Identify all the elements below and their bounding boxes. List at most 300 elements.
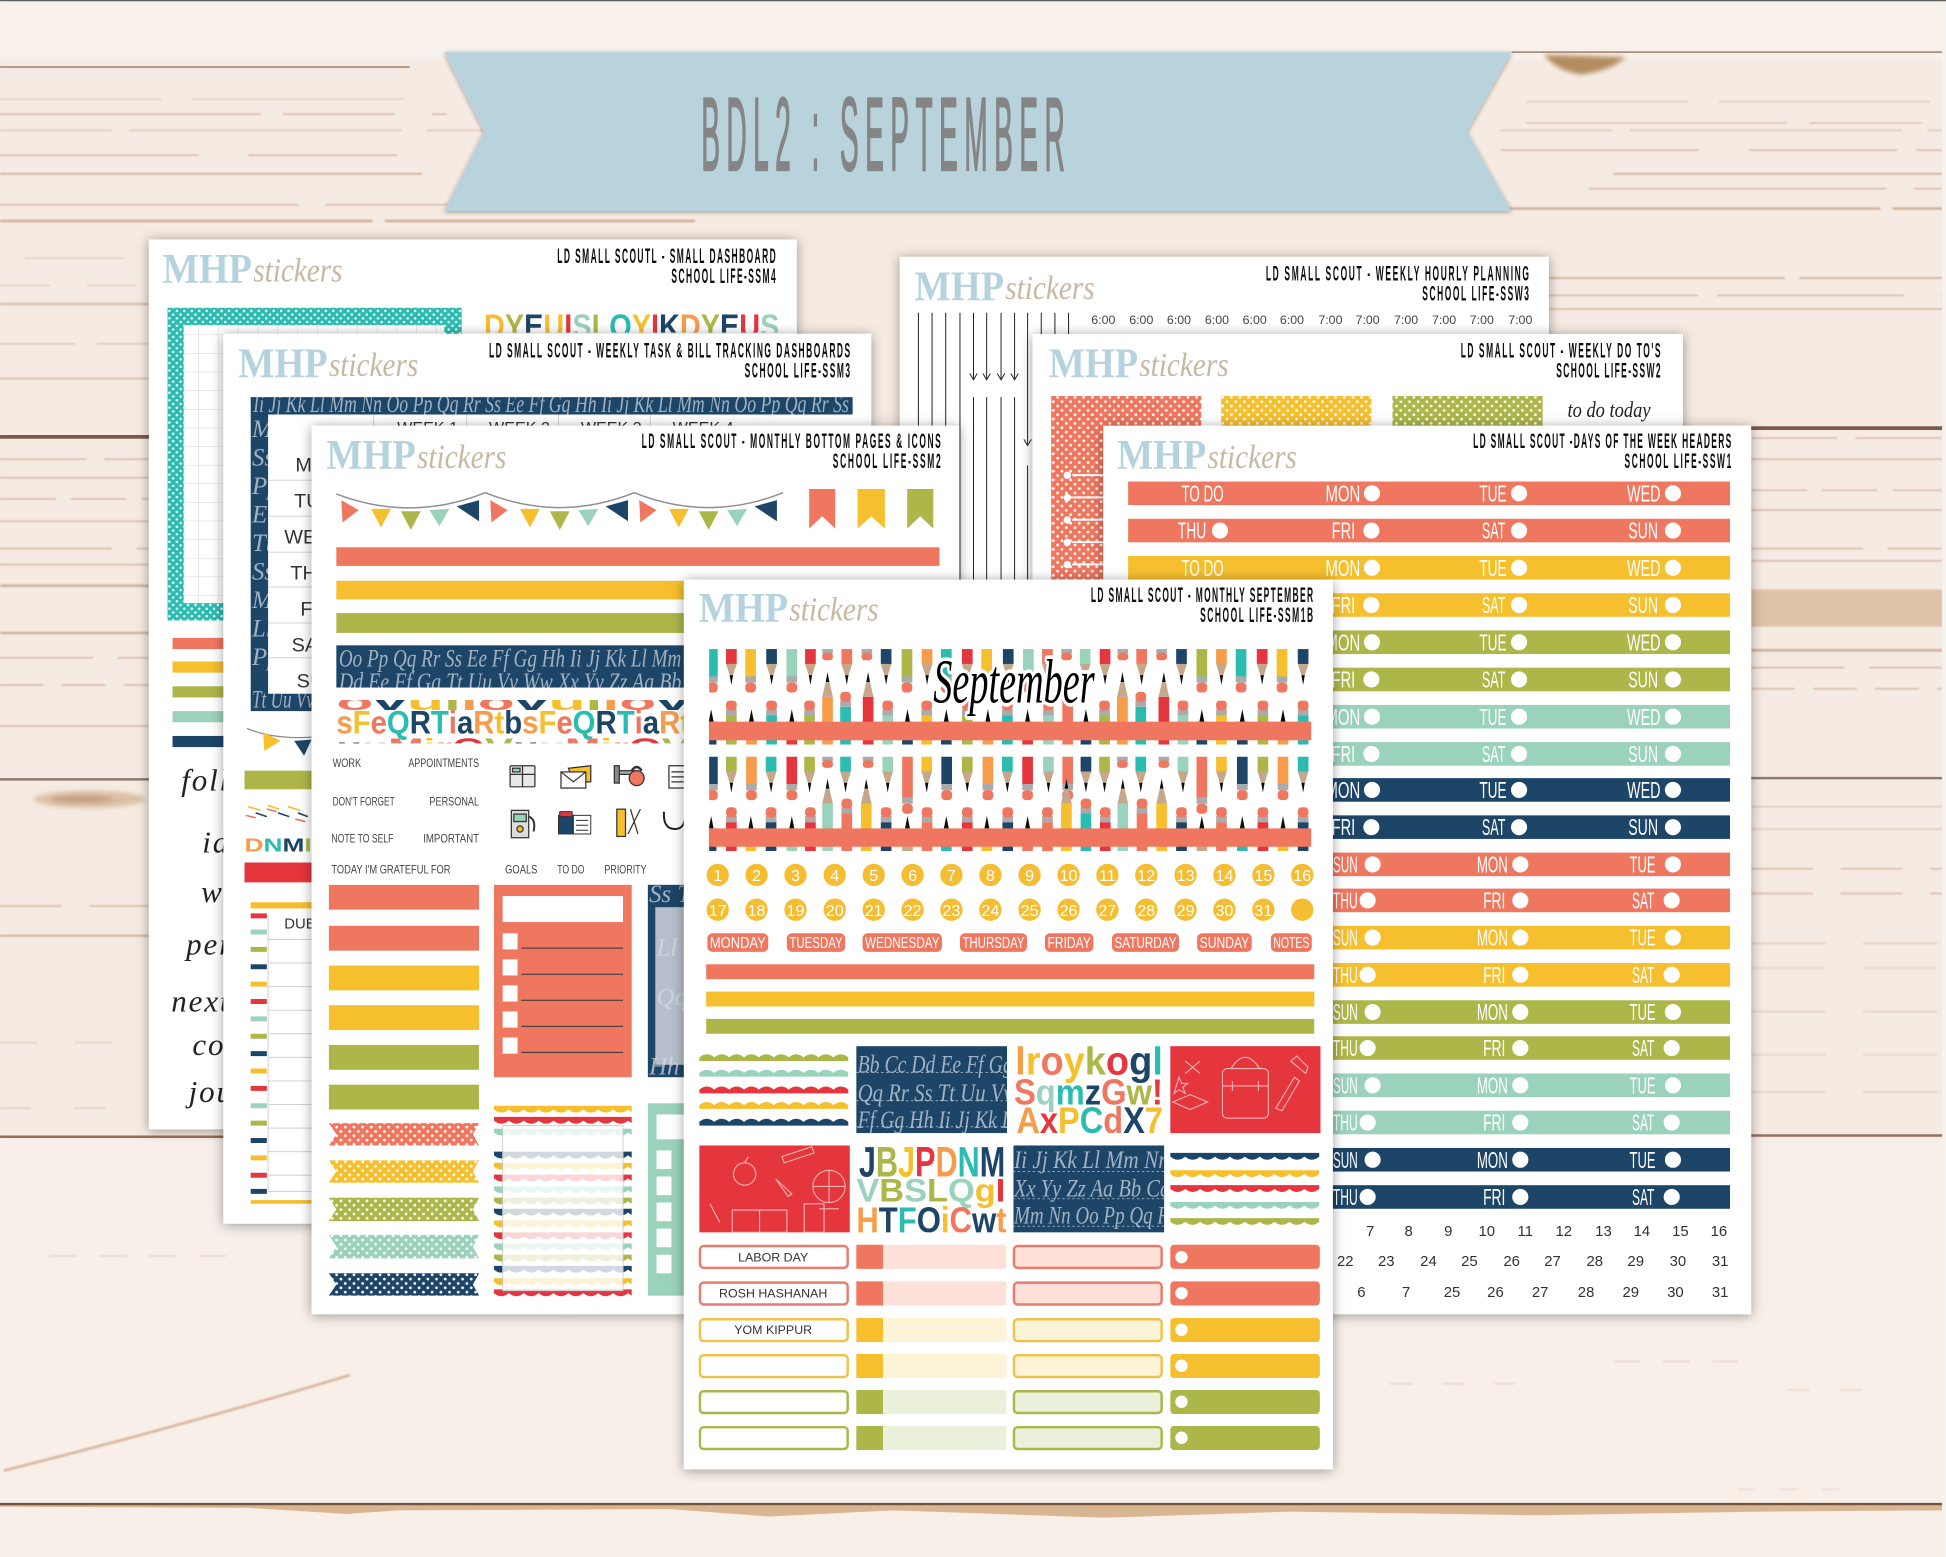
header strips: first cycle: SAT <box>1482 741 1505 767</box>
knot: left <box>34 791 145 808</box>
bunting <box>336 493 783 530</box>
script words: con <box>192 1027 243 1062</box>
sheet title: SCHOOL LIFE-SSM2 <box>833 449 941 473</box>
date circles: 5 <box>869 867 878 885</box>
date circles: 20 <box>826 902 844 920</box>
script words <box>171 763 254 1109</box>
date numbers: 23 <box>1378 1254 1395 1270</box>
green polka block <box>1392 396 1543 433</box>
mint checklist card <box>648 1103 697 1296</box>
header strips: first cycle: FRI <box>1332 592 1355 618</box>
script words: pers <box>184 926 247 961</box>
date numbers: 15 <box>1672 1224 1689 1240</box>
due table: DUE <box>284 916 316 932</box>
date circles: 31 <box>1254 902 1272 920</box>
yellow polka block <box>1221 396 1371 433</box>
header strips: first cycle: TUE <box>1479 555 1507 581</box>
header strips: second cycle: THU <box>1333 962 1358 988</box>
sheet title: SCHOOL LIFE-SSM4 <box>671 265 776 288</box>
colour bars <box>706 964 1314 1034</box>
weekday and week labels: FRI <box>300 599 332 621</box>
weekday and week labels: WEEK 3 <box>581 419 642 437</box>
date numbers <box>1337 1224 1728 1301</box>
header strips: first cycle: SUN <box>1628 667 1658 693</box>
logo: stickers <box>417 439 506 476</box>
header strips: second cycle: THU <box>1333 1035 1358 1061</box>
navy script tracker frame <box>251 391 864 713</box>
date circles: 4 <box>830 867 839 885</box>
date numbers: 6 <box>1357 1285 1366 1301</box>
time labels: 7:00 <box>1356 313 1380 327</box>
logo: stickers <box>329 347 418 384</box>
header strips: first cycle: MON <box>1325 777 1360 803</box>
date circles: 30 <box>1215 902 1233 920</box>
script block: row 2: Mm Nn Oo Pp Qq R <box>1013 1203 1169 1230</box>
due table <box>268 916 318 1191</box>
header strips: first cycle: SUN <box>1628 814 1658 840</box>
script words: follo <box>181 763 247 798</box>
date circles: 25 <box>1021 902 1039 920</box>
sheet: days of the week headers SSW1 <box>1103 426 1751 1314</box>
navy script tracker frame: Tt <box>252 530 274 557</box>
holiday names: LABOR DAY <box>738 1251 808 1265</box>
weekday labels: WEDNESDAY <box>865 934 940 952</box>
date numbers: 27 <box>1544 1254 1561 1270</box>
logo: MHP <box>326 432 416 479</box>
header strips: second cycle: TUE <box>1630 999 1656 1025</box>
banner: BDL2 September: BDL2 : SEPTEMBER <box>701 77 1065 193</box>
header strips: second cycle: FRI <box>1483 887 1505 913</box>
holiday names <box>719 1251 827 1337</box>
header strips: second cycle: THU <box>1333 1110 1358 1136</box>
script block: row 2: Ii Jj Kk Ll Mm Nn <box>1013 1147 1169 1174</box>
logo: stickers <box>253 253 343 290</box>
sheet title: LD SMALL SCOUT - WEEKLY TASK & BILL TRACKING DASHBOARDS <box>489 339 850 363</box>
date numbers: 30 <box>1670 1254 1686 1270</box>
date circles: 17 <box>709 902 727 920</box>
icon: bill <box>669 766 686 788</box>
logo: stickers <box>1208 439 1297 476</box>
date numbers: 12 <box>1555 1224 1572 1240</box>
colour stripes <box>173 638 247 747</box>
header strips: second cycle: FRI <box>1483 1184 1505 1210</box>
logo <box>915 263 1095 310</box>
header strips: first cycle: SAT <box>1482 518 1505 544</box>
knot: upper right <box>1544 55 1626 74</box>
weekday and week labels: THU <box>290 563 331 585</box>
logo: MHP <box>1117 432 1206 479</box>
alphabet block: row 1 <box>1015 1046 1162 1134</box>
script words: next r <box>171 983 254 1018</box>
icon: package <box>510 766 535 787</box>
two-tone label column <box>856 1245 1007 1450</box>
alphabet strip: u u M ir O V u u M ir O V <box>336 735 691 762</box>
logo <box>1117 432 1297 479</box>
weekday and week labels: MON <box>295 455 342 477</box>
sheet title <box>1266 262 1529 306</box>
date circles: 22 <box>904 902 922 920</box>
header strips: second cycle: THU <box>1333 1184 1358 1210</box>
time labels: 6:00 <box>1280 313 1304 327</box>
alphabet block: row 2: JBJPDNM <box>859 1138 1005 1185</box>
small stamp labels: PERSONAL <box>429 794 479 808</box>
event label column <box>700 1246 848 1449</box>
date numbers: 25 <box>1444 1285 1460 1301</box>
pale outlined label column <box>1014 1246 1162 1449</box>
date circles: 15 <box>1254 867 1272 885</box>
small stamp labels: PRIORITY <box>604 863 647 877</box>
sheet: weekly hourly planning SSW3 <box>900 257 1549 1147</box>
alphabet strip: sFeQRTiaRtbsFeQRTiaRt <box>336 704 690 740</box>
date numbers: 31 <box>1712 1285 1728 1301</box>
date circles: 29 <box>1177 902 1195 920</box>
date numbers: 7 <box>1402 1285 1410 1301</box>
date circles: 28 <box>1137 902 1155 920</box>
small stamp labels <box>331 756 647 877</box>
weekday labels: MONDAY <box>710 934 766 952</box>
date circles: 10 <box>1060 867 1078 885</box>
small stamp labels: GOALS <box>505 863 537 877</box>
tan wood band <box>1751 589 1942 627</box>
icon: comb and scissors <box>617 809 640 836</box>
sheet: small dashboard SSM4 <box>149 240 797 1129</box>
icon: medicine <box>558 812 591 834</box>
logo <box>326 432 506 479</box>
date numbers: 7 <box>1366 1224 1374 1240</box>
header strips: first cycle: FRI <box>1332 741 1355 767</box>
header strips: first cycle: MON <box>1325 629 1360 655</box>
weekday labels: SATURDAY <box>1114 934 1177 952</box>
header strips: first cycle: WED <box>1627 704 1661 730</box>
alphabet block: row 1: SqmzGw! <box>1014 1072 1163 1113</box>
sheet: weekly task and bill tracking SSM3 <box>223 334 871 1224</box>
time labels: 7:00 <box>1394 313 1418 327</box>
date numbers: 26 <box>1487 1285 1504 1301</box>
navy script card <box>648 884 684 1078</box>
header strips: first cycle: SUN <box>1628 592 1658 618</box>
date numbers: 9 <box>1444 1224 1452 1240</box>
header strips: first cycle: WED <box>1627 629 1661 655</box>
navy script tracker frame: Mm <box>251 416 291 443</box>
navy script tracker frame: Mm <box>251 587 291 614</box>
date circles <box>707 864 1313 921</box>
header strips: second cycle: TUE <box>1630 1072 1656 1098</box>
date circles: 26 <box>1060 902 1078 920</box>
time labels: 6:00 <box>1091 313 1115 327</box>
weekday labels: TUESDAY <box>789 934 843 952</box>
alphabet block: row 1: lroykogl <box>1015 1040 1163 1084</box>
date numbers: 30 <box>1667 1285 1684 1301</box>
time labels: 7:00 <box>1508 313 1532 327</box>
date circles: 21 <box>865 902 883 920</box>
date circles: 8 <box>986 867 995 885</box>
date numbers: 16 <box>1711 1224 1727 1240</box>
date numbers: 31 <box>1712 1254 1728 1270</box>
weekday labels: FRIDAY <box>1047 934 1091 952</box>
sheet title: LD SMALL SCOUT - WEEKLY HOURLY PLANNING <box>1266 262 1529 286</box>
weekday and week labels: WEEK 1 <box>397 419 458 437</box>
coral polka block <box>1051 396 1201 644</box>
holiday names: YOM KIPPUR <box>734 1323 812 1337</box>
bunting fragment <box>247 728 313 756</box>
logo: stickers <box>789 592 879 629</box>
script block: row 2: Xx Yy Zz Aa Bb Cc <box>1013 1175 1169 1202</box>
date numbers: 25 <box>1461 1254 1478 1270</box>
header strips: first cycle: MON <box>1325 555 1360 581</box>
header strips: second cycle: MON <box>1477 999 1508 1025</box>
scallop block: row 2 <box>1170 1153 1319 1225</box>
weekday and week labels: SAT <box>292 635 329 657</box>
header strips: first cycle: TUE <box>1479 629 1507 655</box>
sheet title: SCHOOL LIFE-SSM3 <box>745 359 850 383</box>
sheet title: SCHOOL LIFE-SSW3 <box>1422 282 1529 306</box>
logo: stickers <box>1005 270 1095 307</box>
navy script tracker frame: Tt Uu Vv <box>252 686 315 713</box>
date circles: 11 <box>1099 867 1116 885</box>
date circles: 13 <box>1177 867 1195 885</box>
header strips: second cycle: SAT <box>1632 1184 1654 1210</box>
script words: jou <box>185 1074 234 1109</box>
date circles: 23 <box>942 902 960 920</box>
header strips: second cycle: TUE <box>1630 851 1656 877</box>
script block: row 1: Qq Rr Ss Tt Uu Vv <box>858 1080 1014 1107</box>
scallop block: row 1 <box>699 1054 848 1126</box>
coral checklist card <box>494 885 632 1077</box>
logo: MHP <box>915 263 1004 310</box>
scallop tracker <box>494 1098 644 1297</box>
sheet title <box>1473 430 1731 473</box>
small stamp labels: APPOINTMENTS <box>408 756 479 770</box>
September script title: September <box>933 648 1095 716</box>
logo: MHP <box>699 585 788 632</box>
weekday labels: SUNDAY <box>1200 934 1249 952</box>
header strips: first cycle <box>1128 480 1730 840</box>
date circles: 18 <box>748 902 766 920</box>
header strips: second cycle: FRI <box>1483 1110 1505 1136</box>
coral bar <box>709 828 1311 847</box>
header strips: first cycle: TO DO <box>1181 555 1224 581</box>
date numbers: 28 <box>1578 1285 1594 1301</box>
header strips: first cycle: FRI <box>1332 667 1355 693</box>
date numbers: 13 <box>1595 1224 1612 1240</box>
sheet title: SCHOOL LIFE-SSW2 <box>1556 359 1661 383</box>
date numbers: 29 <box>1622 1285 1639 1301</box>
header strips: second cycle: FRI <box>1483 962 1505 988</box>
script words: we <box>201 874 239 909</box>
date circles: 24 <box>981 902 999 920</box>
header strips: second cycle: SUN <box>1333 999 1358 1025</box>
header strips: second cycle: MON <box>1477 851 1508 877</box>
date numbers: 29 <box>1627 1254 1644 1270</box>
small stamp labels: IMPORTANT <box>423 832 479 846</box>
logo: stickers <box>1139 347 1229 384</box>
sheet: monthly September SSM1B <box>684 580 1333 1469</box>
date circles: 2 <box>752 867 761 885</box>
sheet title <box>557 245 776 288</box>
small stamp labels: TODAY I'M GRATEFUL FOR <box>331 863 451 877</box>
header strips: second cycle: SUN <box>1333 1147 1358 1173</box>
header strips: first cycle: SAT <box>1482 667 1505 693</box>
navy script card: Ss Tt <box>649 881 699 908</box>
header strips: first cycle: SAT <box>1482 592 1505 618</box>
sheet title: SCHOOL LIFE-SSM1B <box>1200 603 1313 627</box>
header strips: first cycle: WED <box>1627 555 1661 581</box>
header strips: first cycle: FRI <box>1332 518 1355 544</box>
date circles: 7 <box>947 867 956 885</box>
red school doodle block: backpack <box>1170 1046 1320 1133</box>
header strips: second cycle: FRI <box>1483 1035 1505 1061</box>
logo <box>238 340 418 387</box>
script block: row 1: Bb Cc Dd Ee Ff Gg <box>858 1051 1013 1078</box>
polka washi ribbons <box>329 1123 479 1296</box>
coral bar <box>709 722 1311 740</box>
date numbers: 28 <box>1586 1254 1603 1270</box>
sheet: monthly bottom pages and icons SSM2 <box>312 426 959 1314</box>
date numbers: 8 <box>1404 1224 1413 1240</box>
script block: row 1: Ff Gg Hh Ii Jj Kk L <box>857 1107 1013 1134</box>
script block: row 1 <box>856 1046 1014 1134</box>
header strips: second cycle: SAT <box>1632 1035 1654 1061</box>
navy script strip: Dd Ee Ff Gg Tt Uu Vv Ww Xx Yy Zz Aa Bb <box>338 669 681 696</box>
time labels: 7:00 <box>1432 313 1456 327</box>
weekday and week labels <box>284 419 734 693</box>
navy script tracker frame: Ee <box>251 501 278 528</box>
script block: row 2 <box>1013 1145 1169 1232</box>
date circles: 27 <box>1098 902 1116 920</box>
small stamp labels: NOTE TO SELF <box>331 832 394 846</box>
sheet title: LD SMALL SCOUT -DAYS OF THE WEEK HEADERS <box>1473 430 1731 453</box>
logo: MHP <box>1049 340 1138 387</box>
time labels: 6:00 <box>1167 313 1191 327</box>
weekday and week labels: TUE <box>294 491 334 513</box>
logo <box>699 585 879 632</box>
header strips: second cycle: MON <box>1477 925 1508 951</box>
sheet title <box>1461 339 1661 383</box>
sheet title <box>1091 584 1313 627</box>
header strips: first cycle: TO DO <box>1181 480 1224 506</box>
date circles: 6 <box>908 867 917 885</box>
header strips: second cycle: SAT <box>1632 962 1654 988</box>
logo <box>163 246 343 293</box>
header strips: first cycle: MON <box>1325 480 1360 506</box>
header strips: second cycle: SAT <box>1632 1110 1654 1136</box>
header strips: second cycle: TUE <box>1630 1147 1656 1173</box>
date numbers: 14 <box>1634 1224 1650 1240</box>
bookmark flags <box>809 489 933 529</box>
header strips: second cycle: MON <box>1477 1147 1508 1173</box>
logo: MHP <box>238 340 328 387</box>
navy script strip: Oo Pp Qq Rr Ss Ee Ff Gg Hh Ii Jj Kk Ll Mm <box>339 645 681 672</box>
navy script tracker frame: Ss <box>252 444 274 471</box>
header strips: first cycle: MON <box>1325 704 1360 730</box>
header strips: second cycle: THU <box>1333 887 1358 913</box>
navy script tracker frame: Pp <box>251 473 280 500</box>
to do today script: to do today <box>1567 397 1651 422</box>
scallop side column <box>251 902 313 1204</box>
date circles: 1 <box>713 867 722 885</box>
navy script tracker frame: Ii Jj Kk Ll Mm Nn Oo Pp Qq Rr Ss Ee Ff Gg Hh Ii Jj Kk Ll Mm Nn Oo Pp Qq Rr Ss <box>252 391 849 418</box>
time labels: 7:00 <box>1470 313 1494 327</box>
header strips: first cycle: SUN <box>1628 518 1658 544</box>
sheet title <box>489 339 850 383</box>
header strips: first cycle: TUE <box>1479 480 1507 506</box>
pencil strip one <box>706 648 1311 745</box>
date circles: 16 <box>1293 867 1311 885</box>
alphabet block: row 2: VBSLQgI <box>856 1172 1005 1208</box>
date numbers: 22 <box>1337 1254 1354 1270</box>
time labels: 6:00 <box>1243 313 1267 327</box>
diagonal wood streak <box>4 1375 350 1471</box>
header strips: second cycle <box>1128 851 1730 1210</box>
pencil strip two <box>706 757 1311 851</box>
gratitude stripes <box>329 885 479 1109</box>
vertical arrow lines <box>918 313 1069 596</box>
navy script card: Qq <box>657 984 687 1011</box>
date numbers: 26 <box>1503 1254 1520 1270</box>
navy script tracker frame: Ss <box>252 559 274 586</box>
alphabet block: row 2 <box>856 1147 1006 1232</box>
weekday labels: NOTES <box>1273 934 1309 952</box>
icon: gas pump <box>511 810 534 838</box>
date circles: 9 <box>1025 867 1034 885</box>
header strips: second cycle: SUN <box>1333 851 1358 877</box>
navy script tracker frame: Ll <box>251 616 273 643</box>
header strips: first cycle: FRI <box>1332 814 1355 840</box>
time labels <box>1091 313 1532 327</box>
small pattern strips: D N M II <box>245 834 319 855</box>
small stamp labels: DON'T FORGET <box>333 794 395 808</box>
weekday and week labels: SUN <box>297 671 339 693</box>
time labels: 6:00 <box>1205 313 1229 327</box>
header strips: second cycle: SAT <box>1632 887 1654 913</box>
icon: stethoscope <box>664 812 685 829</box>
weekday and week labels: WED <box>284 527 331 549</box>
logo <box>1049 340 1229 387</box>
solid label column with dots <box>1170 1245 1320 1450</box>
header strips: second cycle: SUN <box>1333 1072 1358 1098</box>
alphabet block: row 2: HTFQiCwt <box>856 1199 1007 1240</box>
sheet title: SCHOOL LIFE-SSW1 <box>1625 449 1731 473</box>
header strips: first cycle: TUE <box>1479 777 1507 803</box>
date numbers: 27 <box>1532 1285 1548 1301</box>
red school doodle block: apple and globe <box>699 1145 850 1232</box>
weekday and week labels: WEEK 2 <box>489 419 550 437</box>
navy script strip <box>336 645 684 688</box>
small pattern strips <box>245 771 319 882</box>
icon: dumbbell and kettlebell <box>614 766 644 786</box>
navy script card: Hh <box>648 1054 679 1081</box>
teal grid frame <box>168 308 462 621</box>
banner: BDL2 September <box>444 52 1512 211</box>
small stamp labels: TO DO <box>557 863 585 877</box>
date circles: 3 <box>791 867 800 885</box>
header strips: second cycle: SUN <box>1333 925 1358 951</box>
sheet title: LD SMALL SCOUT - MONTHLY SEPTEMBER <box>1091 584 1313 607</box>
sheet: weekly do to's SSW2 <box>1033 334 1683 1224</box>
alphabet block: row 1: AxPCdX7 <box>1016 1099 1163 1141</box>
header strips: first cycle: WED <box>1627 777 1661 803</box>
colour stripes <box>336 547 939 633</box>
date circles: 14 <box>1215 867 1233 885</box>
header strips: first cycle: SUN <box>1628 741 1658 767</box>
time labels: 7:00 <box>1318 313 1343 327</box>
header strips: first cycle: SAT <box>1482 814 1505 840</box>
header strips: second cycle: TUE <box>1630 925 1656 951</box>
alphabet strip: o v u i i o v u i i o v <box>336 690 692 715</box>
time labels: 6:00 <box>1129 313 1153 327</box>
navy script card: Ll <box>656 935 677 962</box>
weekday labels: THURSDAY <box>962 934 1025 952</box>
